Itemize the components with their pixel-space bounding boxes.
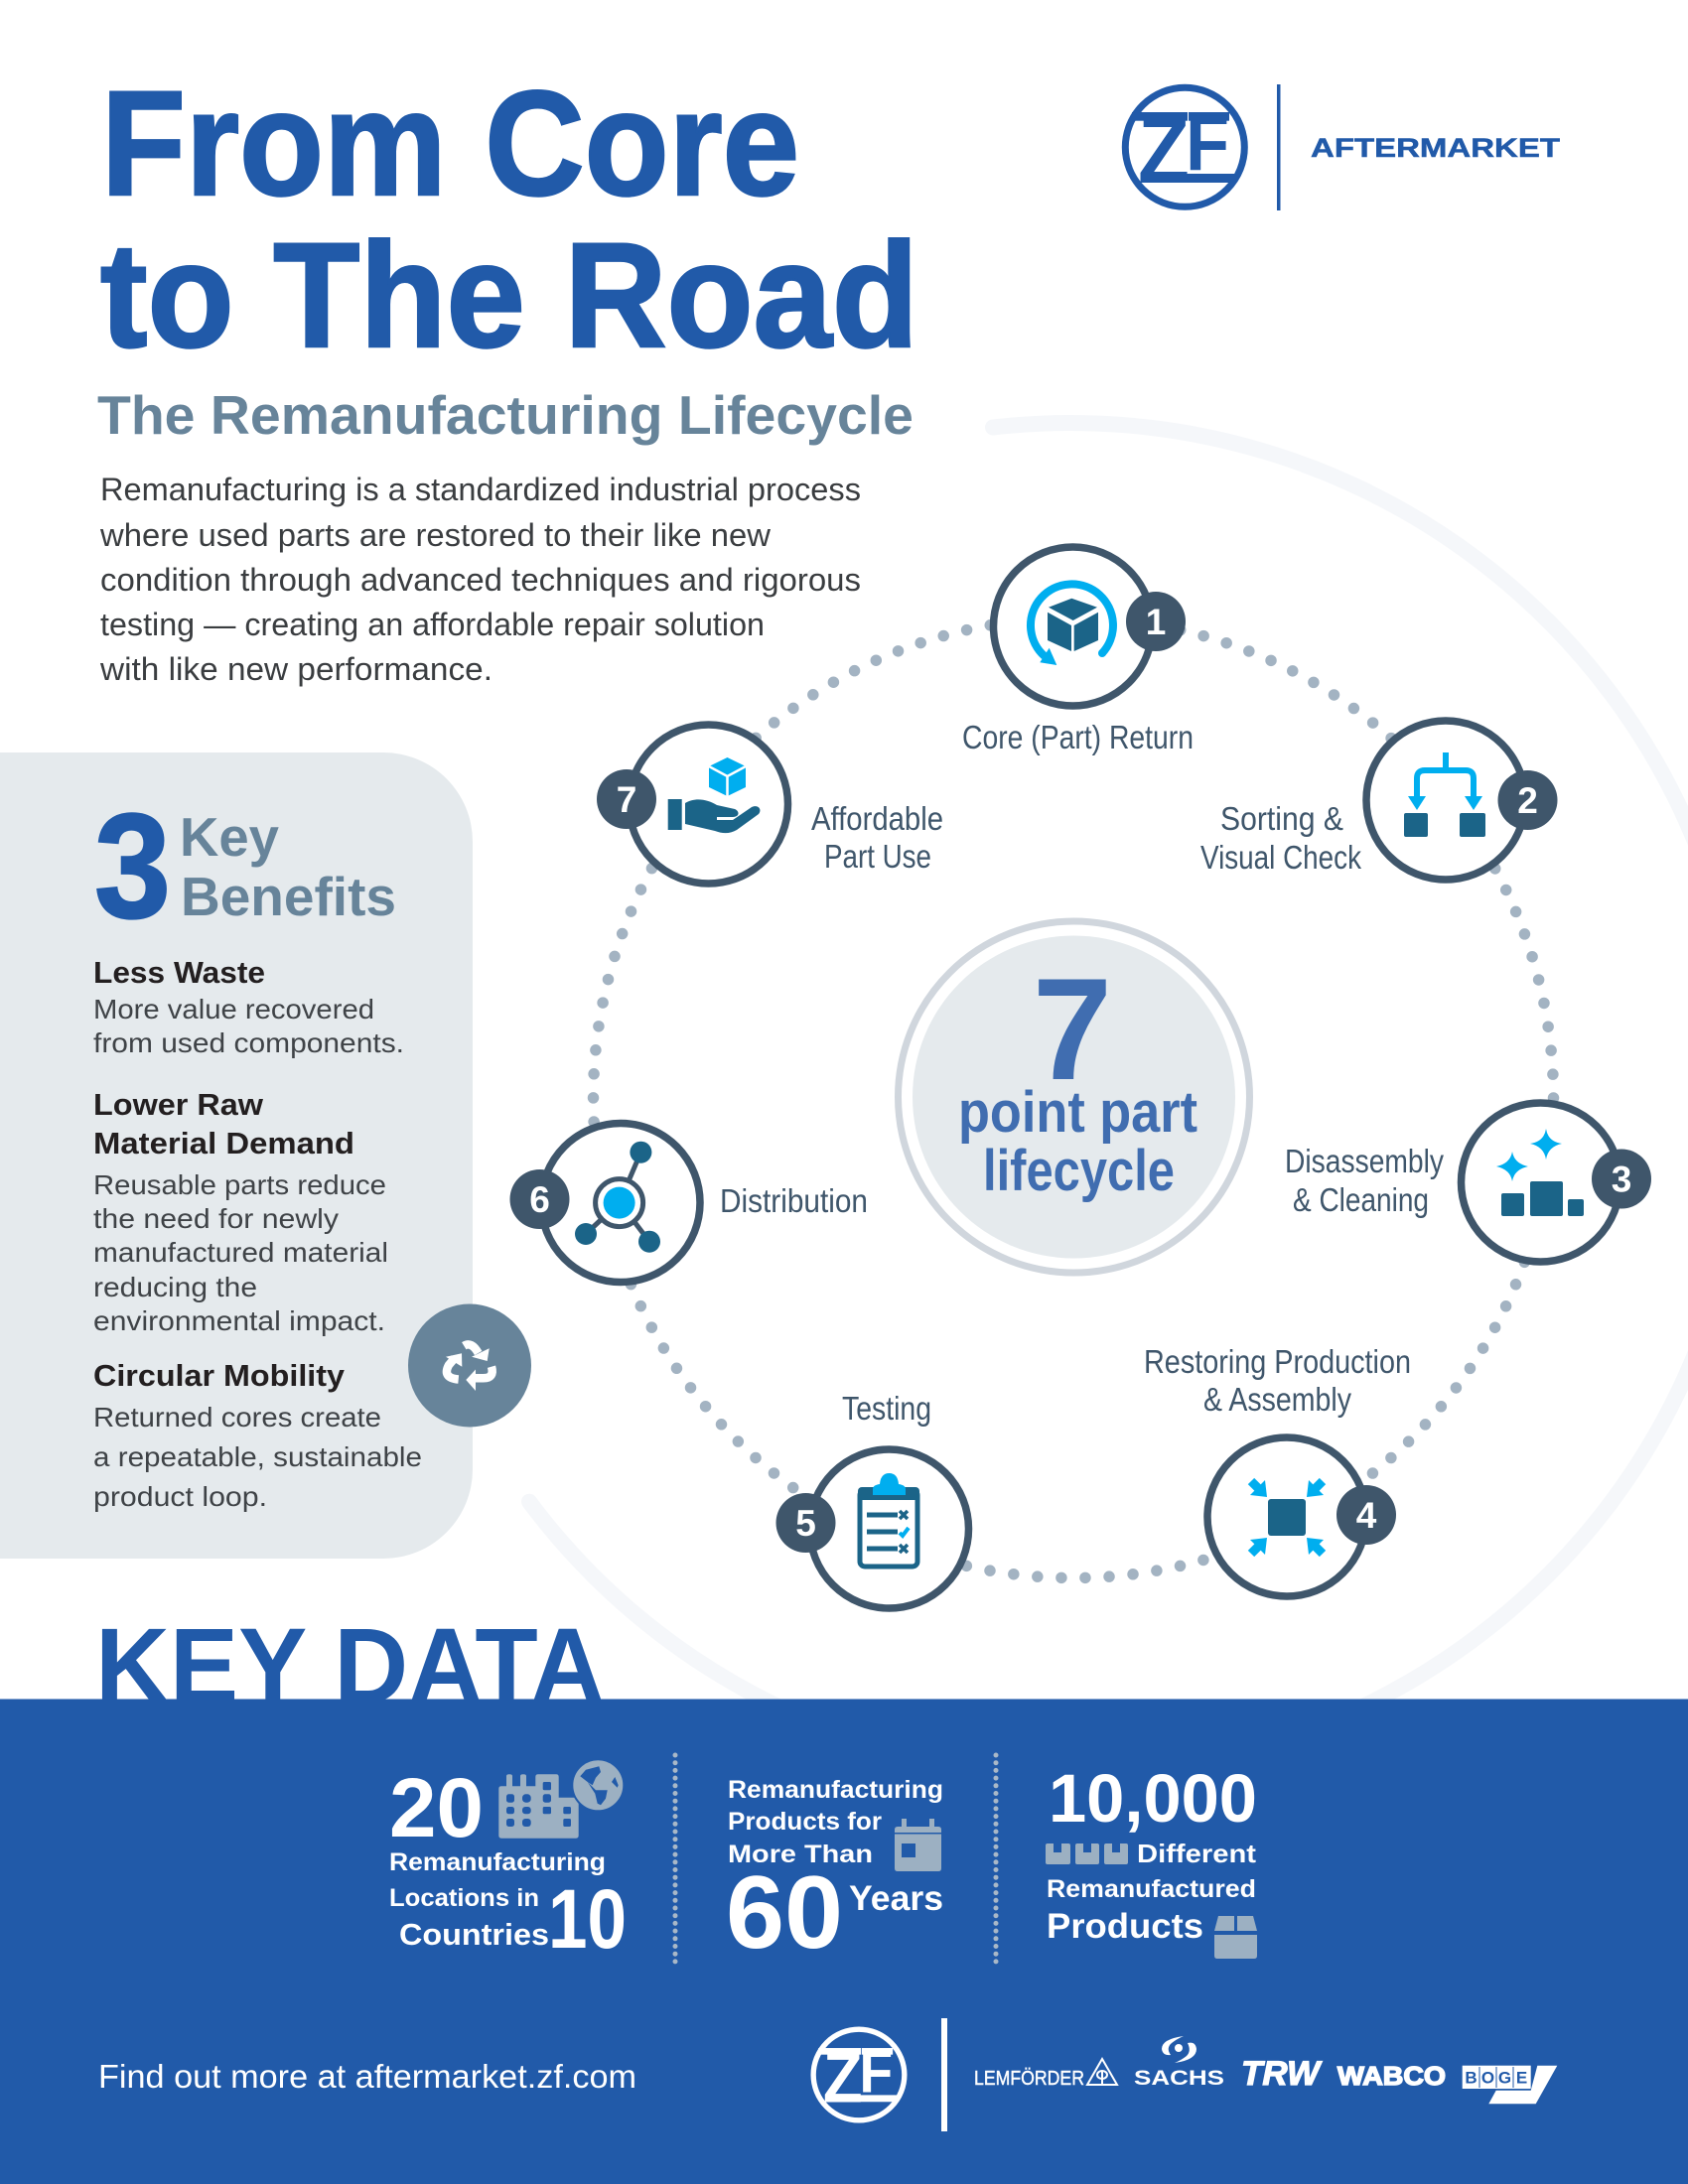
intro paragraph: condition through advanced techniques and rigorous [100, 562, 861, 598]
benefit: circular mobility: a repeatable, sustainable [93, 1441, 422, 1472]
step 1: core return: 1 [1146, 602, 1166, 642]
step 4: restoring production and assembly: Restoring Production [1144, 1343, 1411, 1380]
intro paragraph [99, 472, 861, 687]
step 3: disassembly and cleaning [1285, 1103, 1651, 1262]
logo: ZF white: F [860, 2037, 893, 2105]
icon: calendar [895, 1819, 941, 1871]
icon: network [575, 1142, 660, 1253]
center badge: 7 point part lifecycle: 7 [1033, 948, 1112, 1110]
intro paragraph: testing — creating an affordable repair solution [100, 607, 765, 642]
stat: 20 locations in 10 countries: Locations in [389, 1884, 539, 1912]
step 1: core return: Core (Part) Return [962, 719, 1194, 755]
divider dots [993, 1755, 999, 1968]
step 2: sorting and visual check: Visual Check [1200, 839, 1361, 876]
benefit: circular mobility: product loop. [93, 1481, 267, 1512]
step 5: testing: Testing [842, 1390, 931, 1427]
title: to The Road [100, 211, 918, 378]
brand: Boge: B [1465, 2069, 1477, 2087]
step 7: affordable part use [597, 725, 943, 884]
brand: Boge: O [1481, 2069, 1494, 2087]
intro paragraph: Remanufacturing is a standardized industrial process [100, 472, 861, 507]
logo: ZF Aftermarket: AFTERMARKET [1311, 133, 1561, 163]
benefit: lower raw material demand: Reusable parts reduce [93, 1169, 386, 1200]
icon: three boxes [1046, 1843, 1128, 1864]
step 4: restoring production and assembly [1144, 1343, 1411, 1596]
step 4: restoring production and assembly: 4 [1356, 1495, 1377, 1536]
icon: sorting arrows [1404, 752, 1485, 837]
step 3: disassembly and cleaning: 3 [1612, 1160, 1631, 1199]
logo: ZF white [813, 2029, 905, 2120]
intro paragraph: with like new performance. [99, 651, 492, 687]
subtitle: The Remanufacturing Lifecycle [97, 384, 914, 446]
logo: ZF white: Z [823, 2035, 863, 2117]
panel: key data band [0, 1700, 1688, 2184]
logo: ZF Aftermarket [1125, 84, 1561, 210]
panel: 3 key benefits [0, 752, 473, 1559]
icon: recycle [408, 1304, 531, 1428]
icon: hand holding cube [668, 757, 760, 833]
icon: clipboard [858, 1473, 919, 1567]
center badge: 7 point part lifecycle: lifecycle [983, 1139, 1175, 1203]
stat: 20 locations in 10 countries: Remanufacturing [389, 1848, 606, 1876]
brand: Wabco: WABCO [1337, 2061, 1446, 2091]
intro paragraph: where used parts are restored to their like new [99, 517, 772, 553]
benefit: lower raw material demand: Material Demand [93, 1126, 354, 1160]
brand: TRW: TRW [1241, 2055, 1323, 2093]
benefit: less waste: from used components. [93, 1027, 404, 1058]
stat: more than 60 years: Remanufacturing [728, 1776, 943, 1804]
stat: 20 locations in 10 countries: 10 [548, 1872, 627, 1966]
divider dots [673, 1755, 677, 1968]
step 2: sorting and visual check: 2 [1517, 780, 1538, 821]
step 5: testing: 5 [795, 1503, 816, 1544]
step 1: core return [962, 547, 1194, 755]
icon: open box [1214, 1916, 1257, 1959]
benefit: lower raw material demand: Lower Raw [93, 1087, 264, 1122]
icon: sparkling parts [1496, 1129, 1584, 1216]
stat: more than 60 years: More Than [728, 1841, 873, 1868]
footer link: Find out more at aftermarket.zf.com [98, 2058, 636, 2095]
step 4: restoring production and assembly: & Assembly [1203, 1381, 1351, 1418]
step 6: distribution: 6 [529, 1179, 550, 1220]
stat: more than 60 years: 60 [726, 1855, 843, 1971]
stat: 20 locations in 10 countries [389, 1759, 627, 1966]
icon: converging arrows [1250, 1480, 1324, 1555]
step 6: distribution: Distribution [720, 1182, 868, 1219]
icon: returning cube [1031, 584, 1113, 665]
stat: 10,000 products [1046, 1760, 1257, 1959]
center badge: 7 point part lifecycle: point part [958, 1080, 1197, 1145]
brand: Lemforder: LEMFÖRDER [974, 2068, 1084, 2090]
stat: 10,000 products: Products [1047, 1907, 1203, 1946]
stat: 10,000 products: 10,000 [1049, 1760, 1257, 1837]
step 7: affordable part use: Affordable [811, 800, 943, 837]
benefit: lower raw material demand: the need for newly [93, 1203, 339, 1234]
benefit: lower raw material demand: manufactured material [93, 1237, 388, 1268]
benefit: circular mobility: Returned cores create [93, 1402, 381, 1433]
dotted lifecycle ring [594, 617, 1553, 1578]
step 2: sorting and visual check: Sorting & [1220, 800, 1343, 837]
stat: 10,000 products: Different [1137, 1839, 1256, 1868]
benefit: less waste: Less Waste [93, 955, 265, 990]
step 5: testing [776, 1390, 969, 1608]
brand: Boge: G [1498, 2069, 1511, 2087]
heading: 3 key benefits: 3 [94, 782, 171, 949]
benefit: circular mobility [93, 1358, 422, 1512]
benefit: circular mobility: Circular Mobility [93, 1358, 346, 1393]
step 7: affordable part use: Part Use [824, 838, 931, 875]
icon: factory and globe [498, 1759, 624, 1839]
benefit: less waste: More value recovered [93, 994, 374, 1024]
logo: ZF Aftermarket: Z [1138, 95, 1190, 204]
stat: more than 60 years: Years [849, 1879, 943, 1918]
logo: ZF Aftermarket: F [1186, 98, 1229, 187]
heading: 3 key benefits: Key [180, 806, 279, 868]
benefit: lower raw material demand [93, 1087, 388, 1336]
step 3: disassembly and cleaning: Disassembly [1285, 1143, 1444, 1179]
stat: more than 60 years: Products for [728, 1808, 882, 1836]
title: From Core [101, 60, 799, 226]
benefit: lower raw material demand: environmental impact. [93, 1305, 385, 1336]
heading: 3 key benefits: Benefits [181, 866, 396, 927]
brand: Boge: E [1516, 2069, 1527, 2087]
stat: more than 60 years [726, 1776, 943, 1971]
stat: 20 locations in 10 countries: 20 [389, 1761, 484, 1854]
benefit: lower raw material demand: reducing the [93, 1272, 257, 1302]
title [100, 60, 918, 378]
brand: Sachs: SACHS [1134, 2067, 1224, 2090]
step 3: disassembly and cleaning: & Cleaning [1293, 1181, 1429, 1218]
heading: key data: KEY DATA [95, 1605, 605, 1725]
brand: Boge [1463, 2066, 1557, 2104]
step 6: distribution [510, 1124, 868, 1283]
benefit: less waste [93, 955, 404, 1058]
stat: 20 locations in 10 countries: Countries [399, 1917, 549, 1952]
brand: Lemforder [974, 2059, 1117, 2090]
brand: Sachs [1134, 2036, 1224, 2090]
step 2: sorting and visual check [1200, 721, 1557, 880]
heading: 3 key benefits [94, 782, 396, 949]
stat: 10,000 products: Remanufactured [1047, 1875, 1256, 1903]
step 7: affordable part use: 7 [617, 779, 636, 820]
center badge: 7 point part lifecycle [898, 921, 1249, 1273]
